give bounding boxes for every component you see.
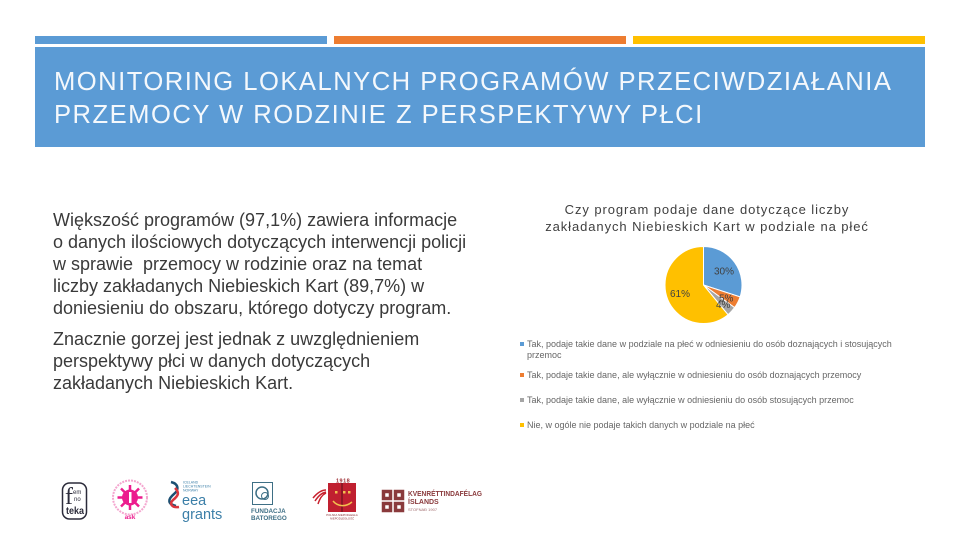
pie chart: 30% xyxy=(714,266,734,278)
logo: Kvenréttindafélag Íslands: STOFNAÐ 1907 xyxy=(408,507,438,512)
text block: main finding: liczby zakładanych Niebieskich Kart (89,7%) w xyxy=(53,276,424,296)
text block: gender perspective: zakładanych Niebieskich Kart. xyxy=(53,373,293,393)
pie chart xyxy=(666,247,742,323)
logo: Femmoteka: no xyxy=(74,497,81,503)
top accent bar: yellow xyxy=(633,36,925,44)
chart title: zakładanych Niebieskich Kart w podziale na płeć xyxy=(545,219,869,234)
text block: main finding: doniesieniu do obszaru, którego dotyczy program. xyxy=(53,298,451,318)
logo: Polish independence centenary: NIEPODLEGŁOŚĆ xyxy=(330,516,354,520)
chart title xyxy=(545,202,869,234)
logo: Femmoteka: teka xyxy=(66,506,84,517)
text block: gender perspective: perspektywy płci w danych dotyczących xyxy=(53,351,370,371)
chart title: Czy program podaje dane dotyczące liczby xyxy=(565,202,849,217)
logo: EEA grants: NORWAY xyxy=(183,488,199,492)
text block: main finding xyxy=(53,210,466,318)
legend xyxy=(520,339,892,430)
pie chart: 4% xyxy=(716,300,731,311)
pie chart: 61% xyxy=(670,289,690,300)
top accent bar: orange xyxy=(334,36,626,44)
logo: Polish independence centenary xyxy=(312,478,358,520)
legend item: none: Nie, w ogóle nie podaje takich danych w podziale na płeć xyxy=(527,420,755,430)
legend item: both: Tak, podaje takie dane w podziale na płeć w odniesieniu do osób doznających i stosujących xyxy=(527,339,892,349)
logo: Fundacja Batorego: FUNDACJA xyxy=(251,508,286,515)
logo: EEA grants xyxy=(168,480,222,522)
logo: ask xyxy=(112,480,148,520)
logo: Kvenréttindafélag Íslands xyxy=(382,489,483,512)
title banner: MONITORING LOKALNYCH PROGRAMÓW PRZECIWDZIAŁANIA xyxy=(54,68,892,96)
logo: Fundacja Batorego: BATOREGO xyxy=(251,515,287,522)
text block: main finding: o danych ilościowych dotyczących interwencji policji xyxy=(53,232,466,252)
text block: main finding: Większość programów (97,1%) zawiera informacje xyxy=(53,210,457,230)
logo: Femmoteka: em xyxy=(73,490,81,496)
text block: gender perspective xyxy=(53,329,419,393)
logo: EEA grants: LIECHTENSTEIN xyxy=(183,484,211,488)
legend item: both: przemoc xyxy=(527,350,562,360)
text block: main finding: w sprawie przemocy w rodzinie oraz na temat xyxy=(53,254,422,274)
logo: Femmoteka: f xyxy=(65,484,73,510)
legend item: perpetrators only: Tak, podaje takie dane, ale wyłącznie w odniesieniu do osób stosujących przemoc xyxy=(527,395,854,405)
title banner: PRZEMOCY W RODZINIE Z PERSPEKTYWY PŁCI xyxy=(54,101,704,129)
pie chart: 5% xyxy=(719,294,734,304)
logo: Fundacja Batorego xyxy=(251,482,287,522)
logo: EEA grants: eea xyxy=(182,493,207,509)
logo: Polish independence centenary: 1918 xyxy=(336,478,350,484)
logo: Femmoteka xyxy=(62,482,88,520)
logo: Kvenréttindafélag Íslands: ÍSLANDS xyxy=(408,497,439,506)
title banner xyxy=(35,47,925,147)
text block: gender perspective: Znacznie gorzej jest jednak z uwzględnieniem xyxy=(53,329,419,349)
logo: Polish independence centenary: POLSKA NIEPODLEGŁA xyxy=(326,513,358,517)
logo: EEA grants: ICELAND xyxy=(183,480,199,484)
top accent bar: blue xyxy=(35,36,327,44)
legend item: both xyxy=(520,339,892,360)
legend item: victims only: Tak, podaje takie dane, ale wyłącznie w odniesieniu do osób doznających przemocy xyxy=(527,370,861,380)
